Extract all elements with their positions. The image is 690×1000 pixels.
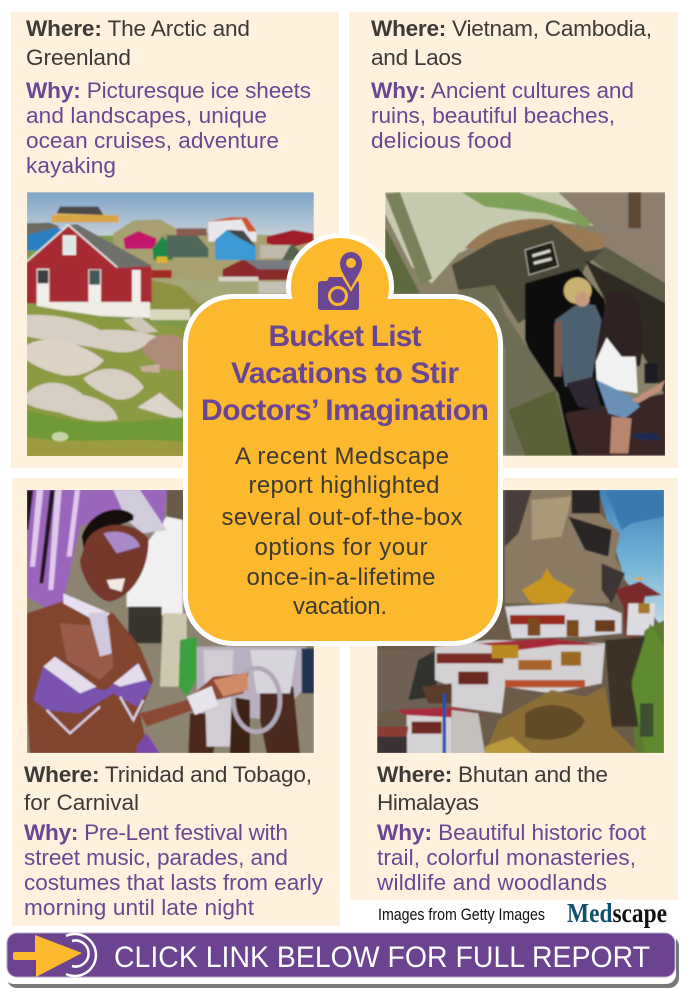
text: Trinidad why: morning until late night — [24, 895, 255, 920]
text: Trinidad where: Where: Trinidad and Tobago, — [24, 762, 312, 787]
text: intro: report highlighted — [248, 472, 440, 499]
text: Trinidad why: street music, parades, and — [24, 845, 288, 870]
text: Vietnam why — [371, 78, 634, 153]
text: Arctic why: Why: Picturesque ice sheets — [26, 78, 311, 103]
photo: Carnival dancer — [27, 489, 314, 753]
text: Arctic why: kayaking — [26, 153, 116, 178]
photo: Cu Chi tunnel entrance — [385, 192, 666, 456]
text: Arctic where: Where: The Arctic and — [26, 16, 250, 41]
panel: central callout — [183, 233, 503, 646]
panel: Bhutan and the Himalayas — [350, 478, 678, 900]
button: click link — [4, 929, 679, 988]
text: Trinidad where: for Carnival — [24, 790, 139, 815]
text: Vietnam where — [371, 16, 652, 70]
heading: title: Doctors’ Imagination — [201, 394, 489, 427]
text: Arctic where: Greenland — [26, 45, 131, 70]
text: intro — [222, 443, 462, 620]
text: Arctic why: and landscapes, unique — [26, 103, 267, 128]
panel: Vietnam, Cambodia, and Laos — [349, 12, 678, 468]
text: intro: vacation. — [293, 593, 387, 620]
icon: arrow with rings — [13, 934, 96, 977]
photo: Greenland village — [27, 192, 314, 457]
text: Trinidad why: costumes that lasts from early — [24, 870, 324, 895]
heading: title — [201, 320, 489, 427]
text: intro: once-in-a-lifetime — [246, 564, 436, 591]
text: intro: A recent Medscape — [235, 443, 449, 470]
text: Bhutan why — [376, 820, 647, 895]
text: Bhutan why: Why: Beautiful historic foot — [377, 820, 647, 845]
panel: Trinidad and Tobago — [12, 478, 340, 926]
icon: camera with map pin — [318, 250, 364, 310]
text: Bhutan why: wildlife and woodlands — [376, 870, 607, 895]
text: Bhutan where — [377, 762, 608, 815]
text: Bhutan where: Where: Bhutan and the — [377, 762, 608, 787]
button label: CLICK LINK BELOW FOR FULL REPORT — [114, 941, 650, 974]
heading: title: Vacations to Stir — [231, 357, 459, 390]
text: Arctic where — [26, 16, 250, 70]
text: Vietnam where: Where: Vietnam, Cambodia, — [371, 16, 652, 41]
heading: title: Bucket List — [268, 320, 422, 353]
text: Bhutan why: trail, colorful monasteries, — [377, 845, 636, 870]
text: Vietnam why: Why: Ancient cultures and — [371, 78, 634, 103]
logo: Medscape: Medscape — [567, 898, 667, 928]
text: Vietnam why: ruins, beautiful beaches, — [371, 103, 615, 128]
text: Vietnam why: delicious food — [371, 128, 512, 153]
text: Trinidad why — [24, 820, 324, 920]
text: Arctic why — [26, 78, 311, 178]
text: intro: several out-of-the-box — [222, 504, 462, 531]
text: Arctic why: ocean cruises, adventure — [26, 128, 279, 153]
text: Trinidad where — [24, 762, 312, 815]
panel: Arctic and Greenland — [11, 12, 339, 468]
text: Trinidad why: Why: Pre-Lent festival with — [24, 820, 288, 845]
text: Bhutan where: Himalayas — [377, 790, 479, 815]
photo: Tiger's Nest monastery — [377, 489, 664, 753]
credit: Getty Images: Images from Getty Images — [378, 906, 545, 924]
text: intro: options for your — [254, 534, 428, 561]
text: Vietnam where: and Laos — [371, 45, 462, 70]
